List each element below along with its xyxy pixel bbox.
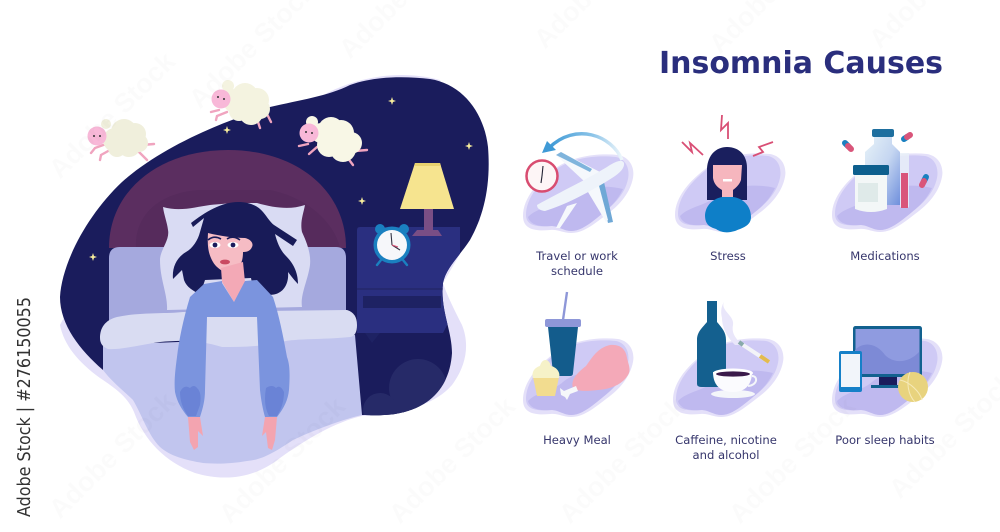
mattress xyxy=(109,247,346,325)
dim clouds xyxy=(363,359,446,416)
icon: smoke xyxy=(721,300,742,345)
lavender background blob xyxy=(60,75,480,478)
icon: coffee cup xyxy=(711,368,756,398)
panel: sleepless woman scene xyxy=(60,75,489,478)
icon: cupcake xyxy=(533,360,559,396)
blob background xyxy=(832,153,942,232)
icon: woman head xyxy=(705,147,751,232)
watermark id text: Adobe Stock | #276150055 xyxy=(15,297,35,517)
sheep 3 xyxy=(299,116,367,165)
hair xyxy=(173,202,298,295)
blob background xyxy=(675,153,785,232)
label line 2: schedule xyxy=(551,264,603,278)
pillow xyxy=(160,203,310,310)
label: Heavy Meal xyxy=(543,433,611,447)
panel: medications xyxy=(832,129,942,263)
icon: alarm clock xyxy=(374,224,410,265)
headboard xyxy=(109,150,346,248)
blob background xyxy=(523,338,633,417)
pyjama top xyxy=(175,280,290,417)
icon: curved arrow xyxy=(542,134,622,160)
label line 2: and alcohol xyxy=(693,448,759,462)
icon: monitor xyxy=(853,326,922,388)
icon: bottle xyxy=(697,301,726,387)
nightstand xyxy=(357,227,460,333)
panel: poor sleep habits xyxy=(832,326,942,447)
label: Poor sleep habits xyxy=(835,433,935,447)
lips xyxy=(220,260,230,264)
face xyxy=(208,233,253,273)
sheep 2 xyxy=(211,80,271,128)
title: Insomnia Causes xyxy=(659,46,943,81)
icon: phone xyxy=(839,351,862,392)
eyes xyxy=(208,237,240,248)
icon: lightning bolts xyxy=(682,115,773,156)
icon: ball xyxy=(898,372,928,402)
cuffs xyxy=(180,386,284,416)
woman in pyjamas xyxy=(173,202,298,450)
label: Stress xyxy=(710,249,746,263)
icon: cigarette xyxy=(739,342,769,362)
panel: caffeine nicotine and alcohol xyxy=(673,300,783,462)
icon: airplane xyxy=(537,152,624,228)
label: Caffeine, nicotine xyxy=(675,433,777,447)
icon: large bottle xyxy=(865,129,900,205)
blob background xyxy=(523,154,633,233)
panel: travel or work schedule xyxy=(523,134,633,278)
icon: vial xyxy=(900,153,909,208)
night sky blob xyxy=(60,77,489,415)
blanket xyxy=(103,335,362,464)
lamp xyxy=(400,163,454,236)
blob background xyxy=(832,338,942,417)
neck xyxy=(221,262,245,302)
icon: chicken leg xyxy=(560,345,630,400)
hands xyxy=(188,417,277,450)
label: Medications xyxy=(850,249,920,263)
stars xyxy=(89,97,473,261)
icon: wall clock xyxy=(526,160,558,192)
icon: drink cup xyxy=(545,292,581,376)
label: Travel or work xyxy=(535,249,618,263)
panel: stress xyxy=(675,115,785,263)
icon: jar xyxy=(853,165,889,212)
icon: pills xyxy=(845,135,926,185)
blob background xyxy=(673,338,783,417)
panel: heavy meal xyxy=(523,292,633,447)
blanket fold xyxy=(100,310,357,349)
sheep 1 xyxy=(88,119,154,160)
